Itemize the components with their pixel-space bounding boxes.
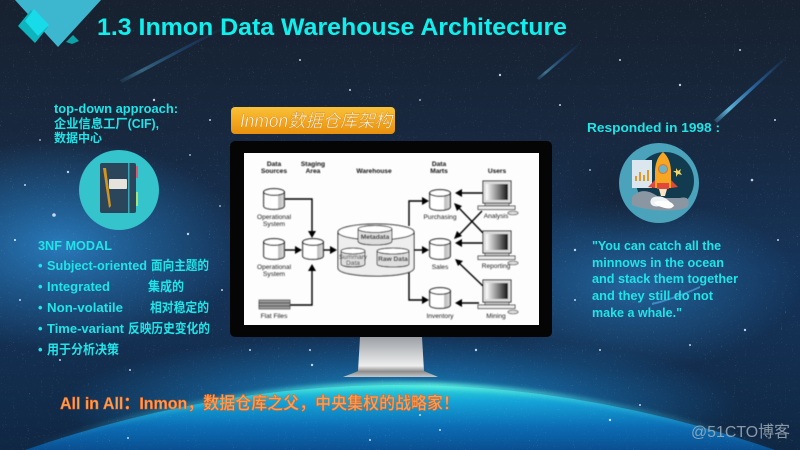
icon: notebook bbox=[79, 150, 159, 230]
monitor bbox=[230, 141, 552, 377]
users: Analysis bbox=[484, 213, 509, 220]
item: non-volatile: • bbox=[38, 300, 43, 315]
item: time-variant: Time-variant bbox=[47, 321, 125, 336]
list heading: 3NF MODAL bbox=[38, 238, 112, 253]
staging area bbox=[303, 239, 323, 259]
warehouse bbox=[338, 224, 414, 276]
conclusion line: All in All：Inmon，数据仓库之父，中央集权的战略家！ bbox=[60, 393, 459, 413]
right heading: Responded in 1998 : bbox=[587, 120, 720, 135]
column headers: Marts bbox=[430, 168, 448, 175]
quote: and stack them together bbox=[592, 271, 738, 286]
item: time-variant: • bbox=[38, 321, 43, 336]
logo: stacked diamonds bbox=[15, 0, 101, 47]
architecture diagram bbox=[257, 161, 518, 320]
users: Reporting bbox=[482, 263, 511, 270]
item: non-volatile: 相对稳定的 bbox=[150, 300, 209, 315]
data marts bbox=[424, 190, 457, 320]
quote bbox=[592, 238, 738, 320]
data marts: Purchasing bbox=[424, 214, 457, 221]
data sources: Operational bbox=[257, 214, 292, 221]
column headers: Staging bbox=[301, 161, 325, 168]
title: 1.3 Inmon Data Warehouse Architecture bbox=[97, 14, 567, 41]
warehouse: Metadata bbox=[361, 234, 390, 241]
screen bbox=[244, 153, 539, 325]
badge: Inmon 数据仓库架构: Inmon数据仓库架构 bbox=[240, 111, 394, 131]
data sources: Flat Files bbox=[261, 313, 288, 320]
item: subject-oriented: 面向主题的 bbox=[151, 258, 209, 273]
badge: Inmon 数据仓库架构 bbox=[231, 107, 395, 134]
monitor stand bbox=[343, 337, 438, 377]
warehouse: Data bbox=[346, 260, 360, 267]
left list: 3NF modal bbox=[38, 238, 210, 357]
item: time-variant bbox=[38, 321, 210, 336]
watermark: @51CTO博客 bbox=[691, 423, 790, 441]
left heading: top-down approach bbox=[54, 102, 178, 145]
column headers: Warehouse bbox=[356, 168, 392, 175]
icon: rocket bbox=[619, 143, 699, 223]
item: subject-oriented: Subject-oriented bbox=[47, 258, 147, 273]
item: integrated bbox=[38, 279, 184, 294]
item: decision support: 用于分析决策 bbox=[47, 342, 119, 357]
data marts: Sales bbox=[432, 264, 449, 271]
item: integrated: 集成的 bbox=[148, 279, 184, 294]
column headers bbox=[261, 161, 506, 175]
quote: and they still do not bbox=[592, 288, 714, 303]
item: decision support: • bbox=[38, 342, 43, 357]
quote: "You can catch all the bbox=[592, 238, 721, 253]
column headers: Data bbox=[267, 161, 281, 168]
quote: minnows in the ocean bbox=[592, 255, 724, 270]
item: subject-oriented bbox=[38, 258, 209, 273]
users: Mining bbox=[486, 313, 506, 320]
users bbox=[478, 181, 518, 320]
item: time-variant: 反映历史变化的 bbox=[128, 321, 210, 336]
data marts: Inventory bbox=[426, 313, 454, 320]
column headers: Sources bbox=[261, 168, 287, 175]
left heading: top-down approach: 数据中心 bbox=[54, 130, 102, 145]
item: non-volatile bbox=[38, 300, 209, 315]
column headers: Users bbox=[488, 168, 506, 175]
quote: make a whale." bbox=[592, 305, 682, 320]
item: non-volatile: Non-volatile bbox=[47, 300, 123, 315]
column headers: Data bbox=[432, 161, 446, 168]
monitor bezel bbox=[230, 141, 552, 337]
data sources: Operational bbox=[257, 264, 292, 271]
warehouse: Summary bbox=[339, 254, 368, 261]
arrows bbox=[285, 193, 483, 305]
left heading: top-down approach: 企业信息工厂(CIF), bbox=[54, 116, 159, 131]
item: integrated: • bbox=[38, 279, 43, 294]
left heading: top-down approach: top-down approach: bbox=[54, 102, 178, 116]
data sources: System bbox=[263, 221, 285, 228]
item: integrated: Integrated bbox=[47, 279, 110, 294]
item: subject-oriented: • bbox=[38, 258, 43, 273]
data sources: System bbox=[263, 271, 285, 278]
warehouse: Raw Data bbox=[378, 256, 408, 263]
column headers: Area bbox=[306, 168, 321, 175]
data sources bbox=[257, 189, 292, 320]
